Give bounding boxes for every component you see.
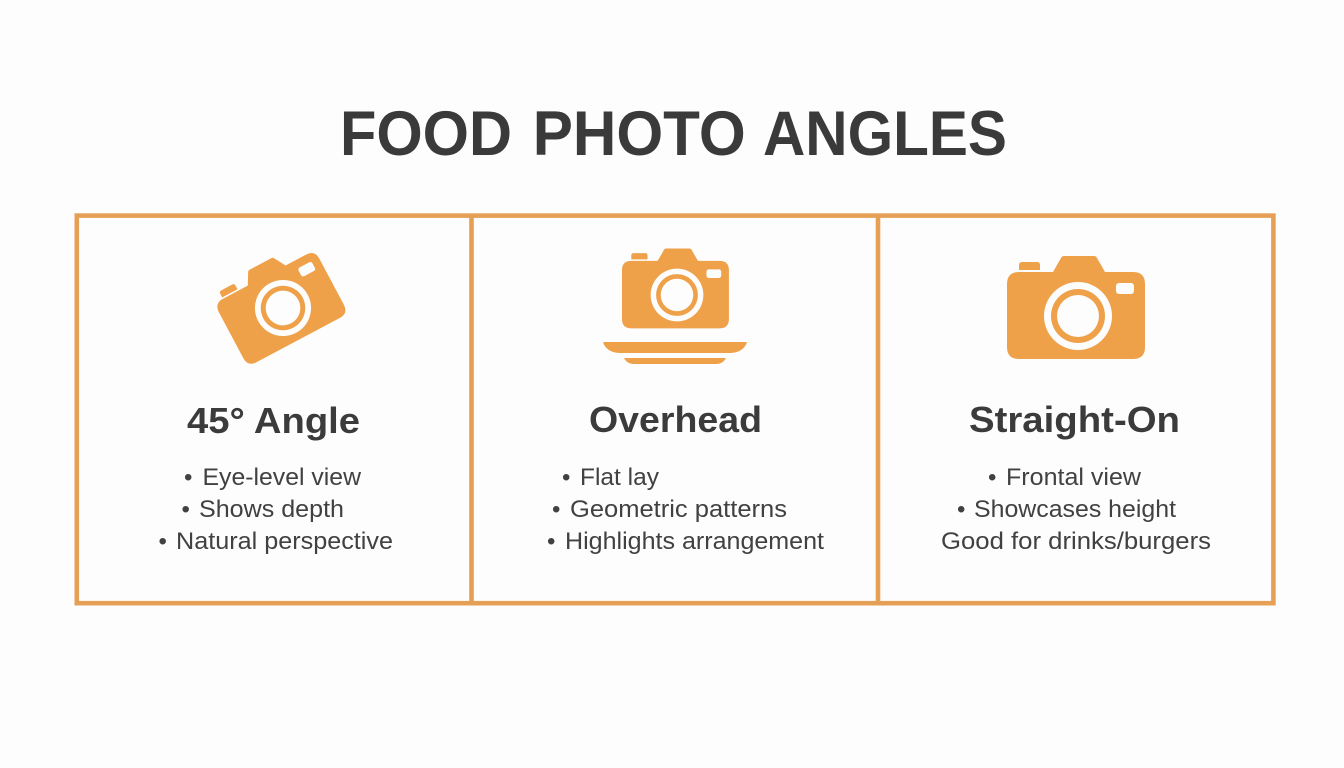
bullet: shows depth: Shows depth xyxy=(199,496,344,523)
icon: tilted camera xyxy=(208,238,348,367)
icon: camera over plate xyxy=(603,248,747,364)
bullet: eye-level view: • xyxy=(184,464,192,491)
bullet: shows depth: • xyxy=(182,496,190,523)
panel: 45 degree angle xyxy=(158,238,393,555)
bullet: geometric patterns: Geometric patterns xyxy=(570,496,787,523)
title: FOOD xyxy=(340,99,512,169)
panel: straight-on xyxy=(941,256,1211,555)
text: good for drinks/burgers: Good for drinks/burgers xyxy=(941,528,1211,555)
bullet: frontal view: Frontal view xyxy=(1006,464,1142,491)
title: PHOTO xyxy=(533,99,746,169)
bullet: natural perspective: • xyxy=(158,528,167,555)
heading: 45 degree angle: 45° Angle xyxy=(187,400,360,441)
bullet: showcases height: • xyxy=(957,496,965,523)
panel: overhead xyxy=(547,248,824,555)
heading: straight-on: Straight-On xyxy=(969,399,1180,440)
icon: front-facing camera xyxy=(1007,256,1145,359)
bullet: flat lay: • xyxy=(562,464,570,491)
bullet: flat lay: Flat lay xyxy=(580,464,659,491)
bullet: highlights arrangement: Highlights arrangement xyxy=(565,528,824,555)
heading: overhead: Overhead xyxy=(589,399,762,440)
panel frame: three columns xyxy=(77,215,1273,604)
bullet: frontal view: • xyxy=(988,464,996,491)
bullet: eye-level view: Eye-level view xyxy=(202,464,362,491)
bullet: showcases height: Showcases height xyxy=(974,496,1176,523)
bullet: natural perspective: Natural perspective xyxy=(176,528,393,555)
bullet: highlights arrangement: • xyxy=(547,528,555,555)
title: ANGLES xyxy=(763,99,1007,169)
title xyxy=(340,99,1007,169)
bullet: geometric patterns: • xyxy=(552,496,560,523)
